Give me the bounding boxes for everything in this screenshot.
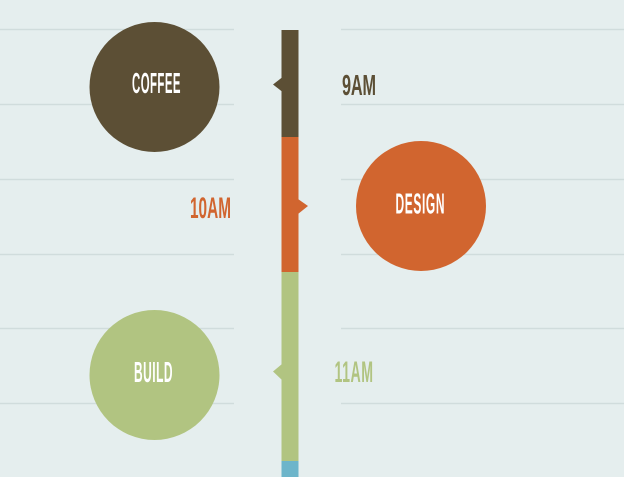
timeline segment: next blue — [282, 461, 298, 477]
circle: design — [356, 141, 486, 271]
timeline segment: 10am orange with right pointer — [282, 137, 308, 272]
timeline segment: 9am brown with left pointer — [273, 30, 298, 137]
label: design: DESIGN — [396, 187, 445, 220]
circle: build — [90, 310, 220, 440]
time label: 9am: 9AM — [342, 69, 376, 101]
label: coffee: COFFEE — [132, 67, 181, 100]
time label: 11am: 11AM — [334, 355, 373, 388]
time label: 10am: 10AM — [190, 192, 231, 224]
timeline segment: 11am green with left pointer — [273, 272, 298, 461]
circle: coffee — [90, 22, 220, 152]
label: build: BUILD — [134, 356, 173, 389]
